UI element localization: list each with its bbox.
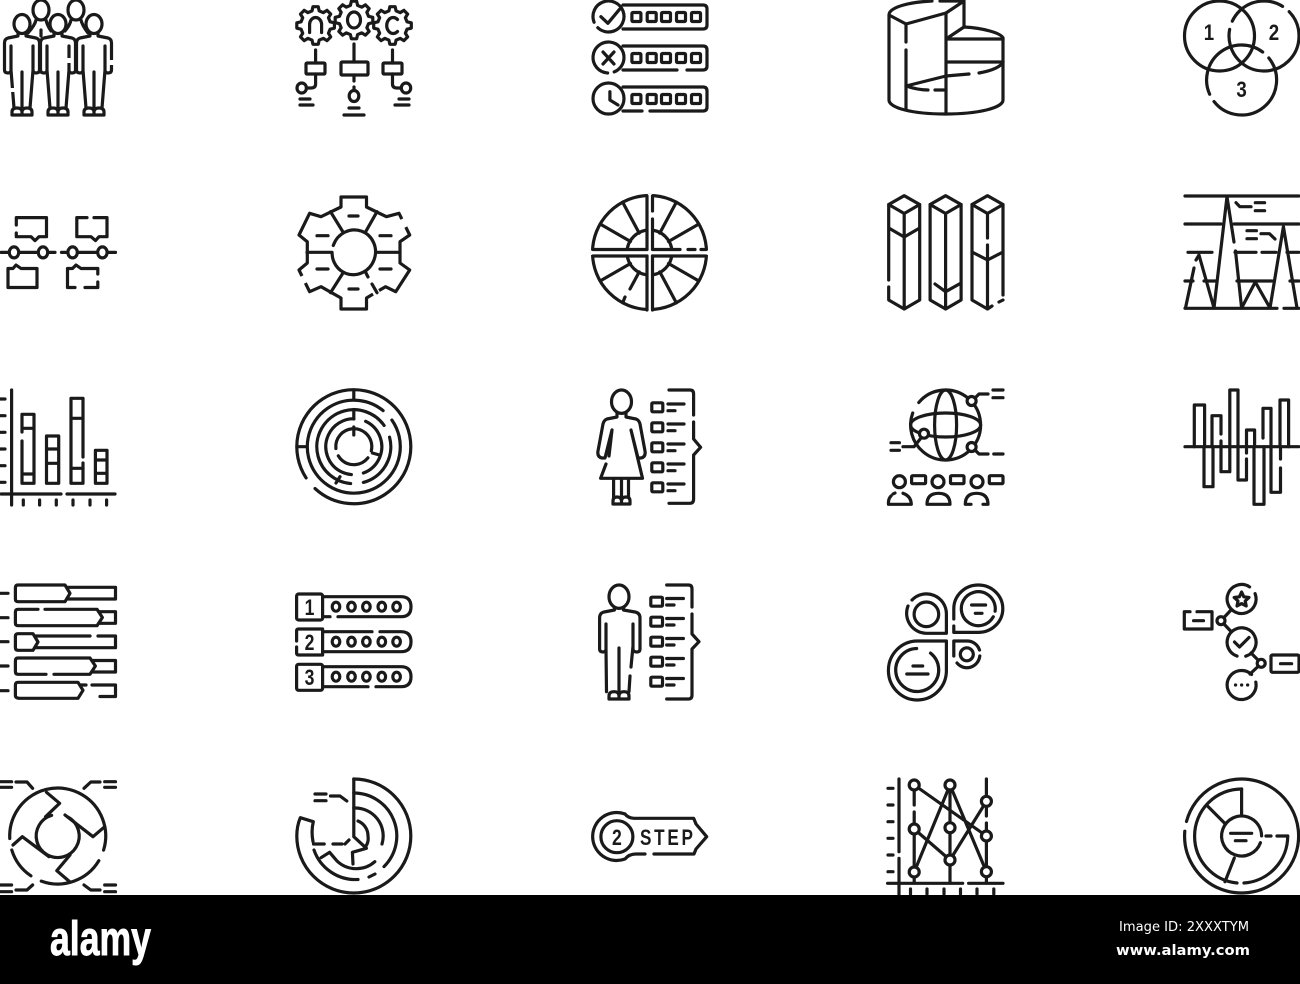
- column 2: [930, 196, 961, 309]
- icon: circular maze: [275, 368, 433, 526]
- row: pending: [593, 83, 707, 114]
- gear right: [374, 7, 411, 44]
- icon: venn diagram 1 2 3: [1184, 0, 1300, 129]
- row: approved: [589, 0, 707, 36]
- logo wordmark: alamy: [50, 913, 151, 966]
- woman figure: [598, 390, 645, 504]
- gear left: [297, 7, 334, 44]
- footer band: [0, 895, 1300, 984]
- bracket: [669, 390, 701, 503]
- list items: [651, 597, 683, 686]
- icon: man with list: [600, 585, 699, 699]
- column 3: [972, 196, 1003, 309]
- icon: segmented wheel chart: [591, 194, 709, 312]
- dots node: [1225, 668, 1258, 702]
- star node: [1223, 580, 1260, 618]
- icon: stacked bar chart: [0, 390, 115, 505]
- icon: three gears flow: [297, 1, 411, 115]
- icon: waveform bars: [1185, 390, 1299, 504]
- petal top right: [954, 585, 1003, 632]
- icon: venn diagram 1 2 3: 1: [1204, 22, 1214, 45]
- icon: 3D column bars: [889, 196, 1003, 309]
- bar 2: [15, 609, 115, 626]
- row 1: 1: [305, 596, 314, 621]
- petal top left: [907, 594, 946, 633]
- icon: cog segmented diagram: [299, 197, 410, 309]
- image id: Image ID: 2XXXTYM: [1119, 919, 1249, 935]
- icon: peak area chart: [1185, 196, 1299, 308]
- row: rejected: [592, 41, 707, 74]
- gear center: [335, 1, 373, 39]
- list items: [652, 403, 684, 492]
- icon: donut with sectors: [1172, 766, 1300, 906]
- icon: step 2 badge: [593, 812, 707, 860]
- icon: timeline with chat and folders: [1, 218, 116, 288]
- petal bottom right: [954, 641, 980, 668]
- column 1: [889, 196, 920, 309]
- icon: line chart with nodes: [888, 779, 1003, 895]
- icon: progress bars: [0, 585, 116, 698]
- bar 5: [15, 682, 115, 698]
- icon: globe and people network: [888, 376, 1003, 504]
- icon: four petal teardrop diagram: [887, 585, 1003, 700]
- icon: circular arrows cycle: [0, 770, 124, 902]
- icon: radial partial rings: [297, 779, 411, 893]
- icon: decision flow with nodes: [1184, 580, 1299, 702]
- bar 3: [15, 634, 115, 650]
- row 2: 2: [305, 631, 314, 656]
- bar 1: [15, 585, 115, 602]
- icon: numbered list bars: [297, 594, 411, 691]
- row 3: 3: [305, 666, 314, 691]
- man figure: [600, 585, 640, 699]
- icon: step 2 badge: 2: [612, 826, 622, 851]
- bar 4: [15, 658, 115, 674]
- icon: venn diagram 1 2 3: 3: [1236, 79, 1247, 102]
- icon: checklist status rows: [589, 0, 707, 114]
- bracket: [667, 585, 699, 699]
- icon: woman with list: [598, 390, 701, 504]
- icon: 3D pie chart: [889, 1, 1003, 114]
- check node: [1223, 624, 1260, 661]
- icon: step 2 badge: STEP: [640, 826, 696, 851]
- icon: group of people: [4, 0, 112, 115]
- icon: venn diagram 1 2 3: 2: [1269, 22, 1279, 45]
- website: www.alamy.com: [1116, 943, 1250, 959]
- petal bottom left: [887, 640, 947, 700]
